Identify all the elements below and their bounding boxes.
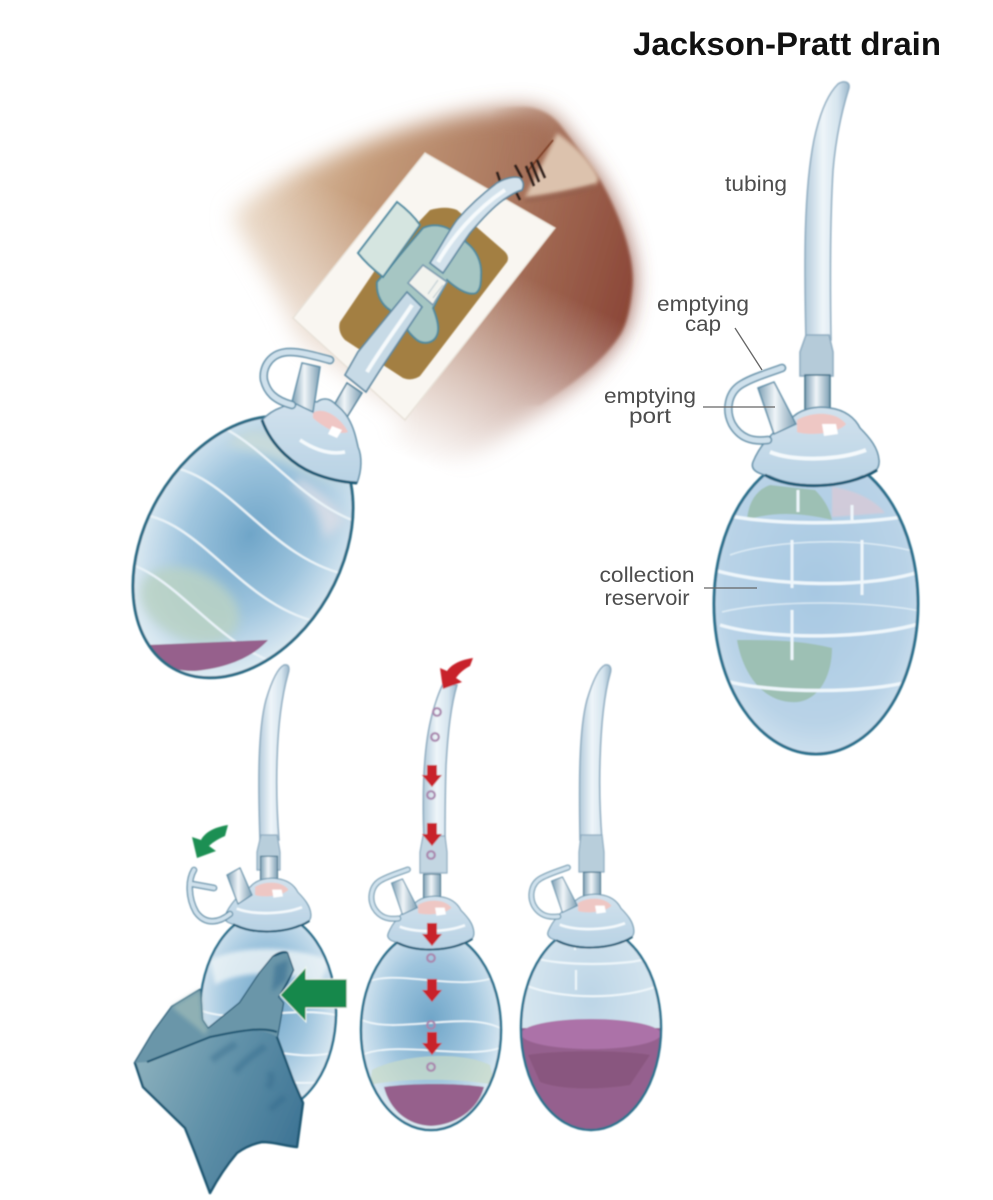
label: collection reservoir (600, 564, 757, 610)
reservoir internal details (714, 485, 925, 702)
purple drainage fluid (147, 640, 268, 671)
emptying port and cap strap (264, 352, 330, 412)
label: emptying cap: emptying (657, 293, 749, 316)
gauze tab (358, 202, 420, 277)
tube clamp (408, 265, 447, 305)
tube sleeve (800, 335, 833, 376)
port and strap (371, 870, 417, 919)
label: emptying port: emptying (604, 385, 696, 408)
arrow: squeeze (280, 967, 347, 1022)
reservoir bulb (714, 454, 918, 754)
bulb outline (200, 912, 336, 1112)
arrow: remove cap (192, 825, 228, 858)
label: emptying port (604, 385, 775, 428)
reflections (136, 429, 352, 672)
label: emptying cap (657, 293, 762, 370)
emptying port and cap (728, 368, 796, 440)
cap (548, 872, 634, 948)
red flow arrows (422, 765, 442, 1055)
label: emptying cap: cap (685, 313, 721, 336)
gauze pad stain (339, 208, 508, 379)
illustration: patient's skin with drain site (232, 107, 633, 476)
labelled Jackson-Pratt drain (714, 82, 925, 754)
tube (423, 684, 457, 840)
skin area (232, 107, 633, 476)
cap (225, 856, 311, 932)
title: Jackson-Pratt drain (633, 26, 941, 62)
tube (580, 665, 611, 840)
bulb (200, 912, 336, 1112)
bulb cap (752, 375, 879, 486)
detached cap strap (190, 870, 230, 921)
arrow: fluid entry (440, 658, 473, 689)
label: emptying port: port (629, 405, 671, 428)
bulb ribs (200, 949, 336, 1085)
bulb outline (88, 377, 398, 717)
bulb contents (362, 975, 500, 1126)
bulb (361, 930, 501, 1130)
tube (259, 665, 289, 840)
label: collection reservoir: reservoir (604, 587, 690, 610)
open port (227, 868, 252, 904)
label: collection reservoir: collection (600, 564, 694, 587)
bulb (521, 926, 661, 1130)
bulb body (88, 377, 398, 717)
bulb outline (521, 926, 661, 1130)
label: tubing: tubing (725, 173, 787, 196)
skin fold (525, 133, 599, 200)
cap (388, 874, 474, 950)
sutures (497, 160, 545, 200)
sleeve (257, 835, 280, 870)
step 3: bulb filled with drainage (520, 665, 662, 1135)
bulb contents (520, 935, 662, 1135)
sleeve (420, 836, 447, 873)
drain securing flange (377, 225, 481, 343)
reservoir outline (714, 454, 918, 754)
collection bulb attached to patient (130, 346, 364, 680)
bulb outline (361, 930, 501, 1130)
sleeve (579, 835, 604, 872)
sterile dressing (293, 153, 555, 420)
port and strap (531, 868, 577, 917)
step 2: drainage flowing into bulb (361, 658, 501, 1130)
drainage tube on skin (345, 177, 523, 392)
stem and cap (262, 383, 362, 483)
gloved hand (135, 952, 303, 1193)
tubing (805, 82, 849, 340)
flow markers (427, 708, 441, 1071)
step 1: squeezing the bulb with gloved hand (135, 665, 347, 1193)
